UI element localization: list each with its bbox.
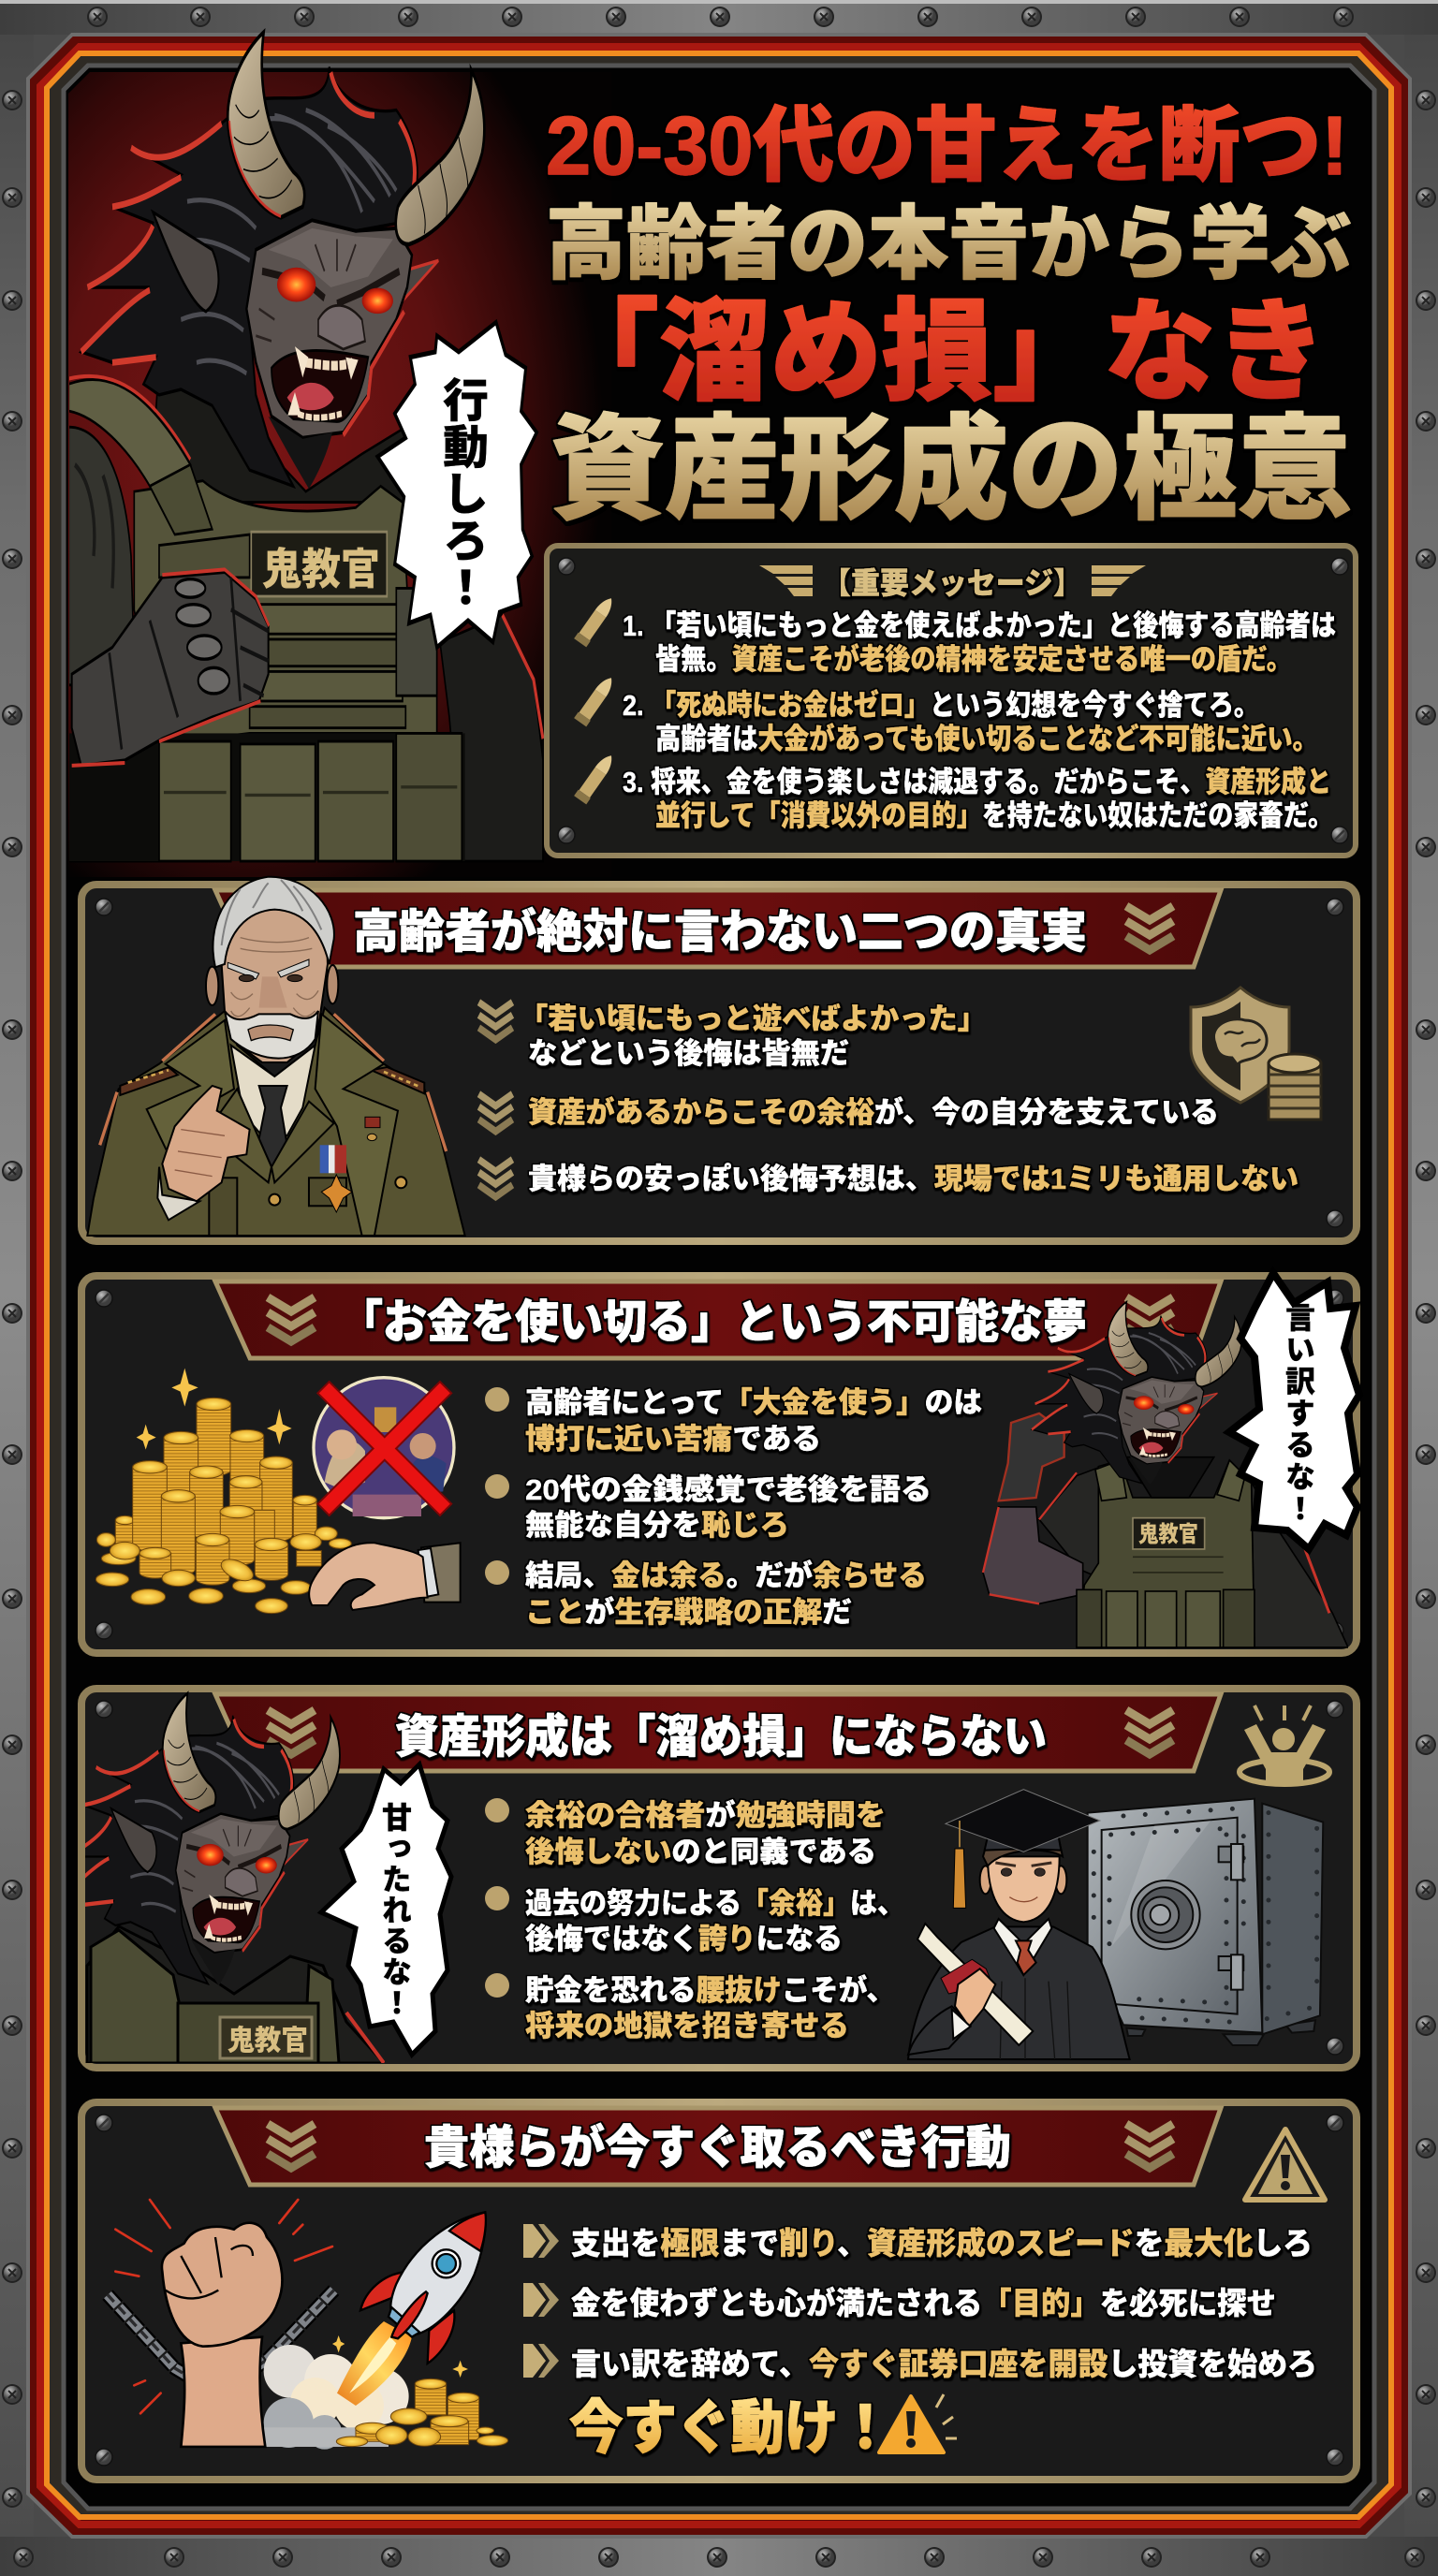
heading: key message: 【重要メッセージ】 bbox=[822, 566, 1082, 600]
main title: 20-30代の甘えを断つ! bbox=[546, 99, 1348, 192]
speech bubble: do not be spoiled bbox=[321, 1764, 451, 2055]
main title bbox=[546, 99, 1352, 534]
smoke bbox=[264, 2345, 409, 2450]
arm and fist bbox=[162, 2223, 282, 2447]
graduate with scroll bbox=[908, 1790, 1130, 2059]
demon with raised fist bbox=[983, 1302, 1348, 1647]
regret list: 将来の地獄を招き寄せる bbox=[525, 2010, 849, 2042]
coin pile illustration bbox=[95, 1368, 351, 1614]
truths list: 資産があるからこその余裕が、今の自分を支えている bbox=[528, 1096, 1219, 1129]
panel: key message bbox=[547, 546, 1356, 856]
messages: 皆無。資産こそが老後の精神を安定させる唯一の盾だ。 bbox=[655, 643, 1292, 676]
crossed-out party medallion bbox=[314, 1378, 454, 1518]
regret list: 後悔ではなく誇りになる bbox=[525, 1923, 843, 1955]
regret list: 貯金を恐れる腰抜けこそが、 bbox=[525, 1974, 895, 2007]
nameplate text: 鬼教官 bbox=[262, 545, 380, 593]
icon: brain shield and coins bbox=[1191, 988, 1321, 1120]
tactical vest bbox=[68, 376, 465, 861]
nameplate text small: 鬼教官 bbox=[1138, 1521, 1198, 1547]
heading ribbon: no saving regret: 資産形成は「溜め損」にならない bbox=[395, 1711, 1047, 1763]
messages: 1. 「若い頃にもっと金を使えばよかった」と後悔する高齢者は bbox=[623, 609, 1336, 642]
messages: 高齢者は大金があっても使い切ることなど不可能に近い。 bbox=[655, 723, 1318, 755]
main title: 資産形成の極意 bbox=[550, 406, 1352, 534]
panel: two truths bbox=[81, 877, 1357, 1241]
speech bubble: no excuses: 言い訳するな！ bbox=[1282, 1302, 1315, 1525]
speech bubble: act now bbox=[377, 322, 536, 648]
truths list bbox=[478, 1003, 1299, 1197]
messages bbox=[623, 609, 1336, 832]
panel: impossible dream bbox=[81, 1273, 1359, 1653]
flame bbox=[337, 2321, 412, 2406]
icon: person escaping hole bbox=[1240, 1705, 1329, 1784]
icon: warning triangle bbox=[1245, 2130, 1325, 2200]
heading ribbon: two truths: 高齢者が絶対に言わない二つの真実 bbox=[353, 906, 1087, 958]
panel: actions bbox=[81, 2102, 1357, 2480]
chains bbox=[108, 2291, 334, 2387]
bullet icons bbox=[574, 594, 617, 804]
action list: 言い訳を辞めて、今すぐ証券口座を開設し投資を始めろ bbox=[571, 2347, 1317, 2381]
rocket bbox=[360, 2212, 486, 2364]
dream list: 博打に近い苦痛である bbox=[525, 1423, 821, 1456]
call to action: 今すぐ動け！ bbox=[569, 2396, 892, 2461]
messages: 3. 将来、金を使う楽しさは減退する。だからこそ、資産形成と bbox=[623, 766, 1331, 798]
dream list: 無能な自分を恥じろ bbox=[525, 1509, 789, 1542]
nameplate text panel 3: 鬼教官 bbox=[227, 2026, 308, 2056]
speech bubble: do not be spoiled: 甘ったれるな！ bbox=[378, 1802, 412, 2018]
heading ribbon: impossible dream: 「お金を使い切る」という不可能な夢 bbox=[339, 1297, 1087, 1348]
messages: 並行して「消費以外の目的」を持たない奴はただの家畜だ。 bbox=[655, 799, 1333, 832]
dream list: 高齢者にとって「大金を使う」のは bbox=[525, 1386, 982, 1419]
hero background glow bbox=[68, 72, 611, 877]
heading ribbon: no saving regret bbox=[215, 1694, 1221, 1771]
regret list: 過去の努力による「余裕」は、 bbox=[525, 1887, 904, 1920]
regret list: 後悔しないのと同義である bbox=[525, 1836, 876, 1868]
main demon instructor character bbox=[68, 32, 543, 861]
coins bbox=[336, 2378, 508, 2447]
dream list: 20代の金銭感覚で老後を語る bbox=[525, 1473, 932, 1506]
broken chain fist illustration bbox=[108, 2200, 508, 2450]
truths list: 「若い頃にもっと遊べばよかった」 bbox=[519, 1003, 987, 1035]
dream list bbox=[485, 1386, 982, 1629]
dream list: 結局、金は余る。だが余らせる bbox=[525, 1559, 927, 1592]
truths list: などという後悔は皆無だ bbox=[528, 1037, 849, 1070]
truths list: 貴様らの安っぽい後悔予想は、現場では1ミリも通用しない bbox=[528, 1163, 1299, 1195]
regret list: 余裕の合格者が勉強時間を bbox=[525, 1799, 886, 1832]
heading ribbon: impossible dream bbox=[215, 1281, 1221, 1358]
speech bubble: no excuses bbox=[1229, 1273, 1359, 1549]
speech bubble: act now: 行動しろ！ bbox=[436, 376, 489, 610]
gloved fist bbox=[72, 569, 269, 766]
action list: 支出を極限まで削り、資産形成のスピードを最大化しろ bbox=[571, 2226, 1313, 2261]
heading ribbon: two truths bbox=[215, 890, 1221, 967]
old officer character bbox=[87, 877, 465, 1236]
panel: no saving regret bbox=[62, 1689, 1357, 2068]
main title: 高齢者の本音から学ぶ bbox=[546, 199, 1351, 289]
dream list: ことが生存戦略の正解だ bbox=[525, 1596, 852, 1629]
heading ribbon: actions: 貴様らが今すぐ取るべき行動 bbox=[424, 2122, 1011, 2174]
action list: 金を使わずとも心が満たされる「目的」を必死に探せ bbox=[571, 2286, 1276, 2320]
heading: key message bbox=[759, 565, 1146, 600]
action list bbox=[523, 2224, 1317, 2381]
reaching hand bbox=[309, 1543, 461, 1610]
messages: 2. 「死ぬ時にお金はゼロ」という幻想を今すぐ捨てろ。 bbox=[623, 689, 1259, 722]
demon arm and collar bbox=[68, 362, 543, 861]
steel safe illustration bbox=[1088, 1799, 1323, 2045]
demon character small bbox=[62, 1693, 384, 2063]
heading ribbon: actions bbox=[215, 2108, 1221, 2185]
regret list bbox=[485, 1798, 904, 2042]
icon: alert triangle bbox=[879, 2394, 957, 2452]
main title: 「溜め損」なき bbox=[548, 291, 1327, 415]
spark lines bbox=[115, 2200, 332, 2413]
